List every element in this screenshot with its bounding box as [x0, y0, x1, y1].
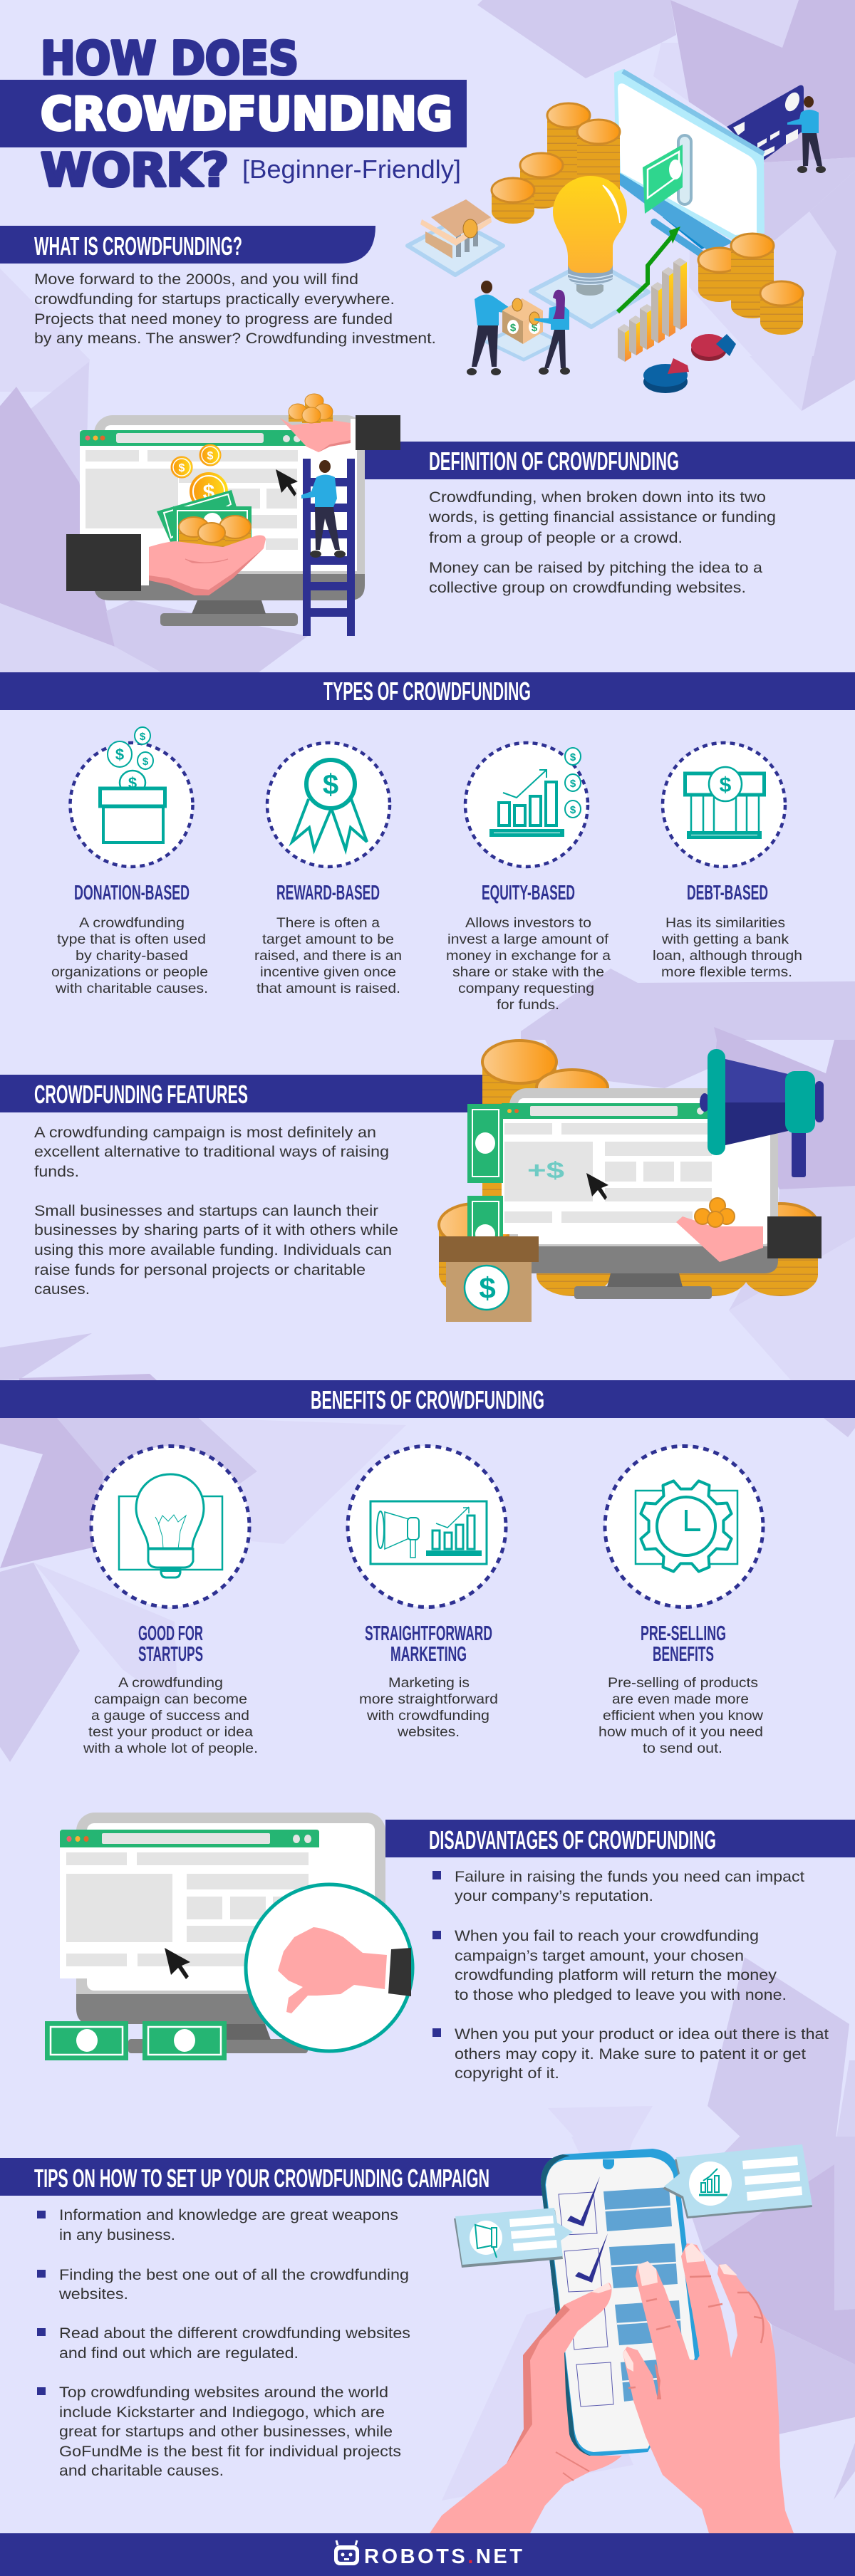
card description: Pre-selling of products	[608, 1675, 758, 1691]
card: donation-based	[51, 727, 208, 996]
coin stacks right	[698, 234, 803, 335]
section heading: types of crowdfunding	[0, 672, 855, 710]
bullet two: websites.	[58, 2286, 128, 2303]
icon: donation box in dashed circle: $	[115, 746, 124, 763]
heading text: WHAT IS CROWDFUNDING?	[34, 231, 242, 261]
card title: REWARD-BASED	[276, 882, 380, 904]
card description: with a whole lot of people.	[83, 1741, 258, 1756]
growth arrow	[618, 226, 680, 312]
card description: invest a large amount of	[447, 932, 609, 947]
section: crowdfunding features	[0, 1041, 824, 1322]
card description	[653, 915, 802, 980]
card title: EQUITY-BASED	[482, 882, 575, 904]
title line: how does: HOW DOES	[41, 33, 299, 85]
browser window	[80, 430, 307, 561]
section: disadvantages of crowdfunding	[45, 1813, 855, 2082]
banknote on screen	[643, 135, 691, 214]
people and donation box: $	[532, 322, 538, 334]
icon: ribbon medal in dashed circle	[267, 743, 390, 867]
body text: words, is getting financial assistance or funding	[428, 509, 776, 526]
title line: work?: WORK?	[41, 145, 229, 197]
icon: growth chart in dashed circle: $	[570, 751, 576, 763]
card description: campaign can become	[94, 1691, 247, 1707]
card: debt-based	[653, 743, 802, 980]
credit card and person	[727, 85, 826, 173]
icon: bank in dashed circle: $	[720, 773, 732, 797]
heading band	[0, 1075, 499, 1112]
card title: GOOD FOR	[138, 1622, 203, 1645]
section heading: benefits of crowdfunding	[0, 1380, 855, 1418]
icon: megaphone and chart in dashed circle	[348, 1446, 506, 1607]
body text: Small businesses and startups can launch their	[34, 1203, 378, 1219]
bullet one: in any business.	[59, 2227, 175, 2243]
illustration: monitor with hands, coins and ladder	[66, 394, 400, 636]
card description: Marketing is	[388, 1675, 470, 1691]
card description: efficient when you know	[603, 1708, 764, 1724]
body text	[34, 1125, 398, 1298]
card description: type that is often used	[57, 932, 206, 947]
right bubble	[663, 2144, 812, 2218]
megaphone	[700, 1049, 824, 1177]
ladder	[303, 459, 355, 636]
bullet three: When you put your product or idea out there is that	[455, 2026, 829, 2043]
illustration: monitor with thumbs down	[45, 1813, 413, 2060]
banknotes	[45, 2021, 227, 2060]
illustration: hands holding phone	[430, 2144, 812, 2533]
list rows	[603, 2187, 682, 2402]
card description: money in exchange for a	[446, 948, 611, 964]
heading band	[0, 226, 375, 264]
card description: are even made more	[612, 1691, 749, 1707]
body text: excellent alternative to traditional ways of raising	[34, 1144, 389, 1160]
card: pre-selling benefits	[598, 1446, 764, 1756]
icon: gear clock in dashed circle	[605, 1446, 763, 1607]
tilted monitor	[614, 69, 765, 259]
card description: A crowdfunding	[118, 1675, 223, 1691]
icon: donation box in dashed circle	[70, 727, 192, 867]
phone	[541, 2149, 700, 2456]
checkboxes	[559, 2192, 613, 2406]
light bulb on platform	[531, 176, 648, 327]
bullet one: Failure in raising the funds you need can impact	[455, 1869, 804, 1885]
falling coins: $	[203, 481, 215, 504]
bullet four: Top crowdfunding websites around the world	[59, 2384, 388, 2401]
title line: crowdfunding: CROWDFUNDING	[41, 88, 452, 141]
card title: DEBT-BASED	[687, 882, 768, 904]
body text: A crowdfunding campaign is most definitely an	[34, 1125, 376, 1141]
card: equity-based	[446, 743, 611, 1013]
card description: with charitable causes.	[55, 981, 208, 996]
card description: by charity-based	[76, 948, 188, 964]
bullet list	[37, 2207, 410, 2479]
body paragraph	[34, 271, 436, 347]
card description	[83, 1675, 258, 1756]
hand with coins	[676, 1198, 822, 1262]
card description: how much of it you need	[598, 1724, 763, 1740]
card title	[138, 1622, 203, 1666]
body text: Money can be raised by pitching the idea to a	[429, 560, 762, 576]
body text: Crowdfunding, when broken down into its two	[429, 489, 766, 506]
bullet two: to those who pledged to leave you with none.	[455, 1987, 787, 2003]
browser window	[60, 1830, 319, 1978]
icon: donation box in dashed circle: $	[128, 774, 137, 792]
cursor	[276, 469, 298, 496]
bullet three: copyright of it.	[455, 2065, 559, 2082]
card: reward-based	[254, 743, 402, 996]
section: tips on setting up a crowdfunding campaign	[0, 2144, 812, 2533]
body text: businesses by sharing parts of it with others while	[34, 1222, 398, 1239]
left bubble	[454, 2208, 573, 2268]
body text: using this more available funding. Individuals can	[34, 1242, 392, 1258]
footer band	[0, 2533, 855, 2576]
donation box: $	[479, 1271, 496, 1305]
card description	[598, 1675, 764, 1756]
cursor	[165, 1948, 190, 1979]
donation box	[439, 1236, 539, 1322]
heading band	[385, 1820, 855, 1857]
bullet one: your company’s reputation.	[455, 1888, 653, 1904]
bullet two: campaign’s target amount, your chosen	[455, 1948, 744, 1964]
bar chart	[618, 258, 687, 362]
bullet four: include Kickstarter and Indiegogo, which are	[59, 2404, 385, 2421]
icon: donation box in dashed circle: $	[142, 756, 149, 768]
card description: websites.	[397, 1724, 460, 1740]
plus dollar sign: +$	[527, 1157, 564, 1183]
cursor	[586, 1173, 608, 1200]
body text: from a group of people or a crowd.	[429, 530, 683, 546]
thumbs down circle	[246, 1884, 413, 2051]
top hand with sleeve and coins	[280, 394, 400, 452]
card description: with crowdfunding	[366, 1708, 489, 1724]
bullet one	[432, 1869, 804, 1904]
body paragraph: Projects that need money to progress are funded	[34, 311, 393, 328]
bullet three: and find out which are regulated.	[59, 2345, 299, 2362]
bullet three: Read about the different crowdfunding websites	[59, 2325, 410, 2342]
bottom hand with sleeve	[66, 534, 266, 595]
bullet three	[432, 2026, 829, 2082]
logo: robot icon	[334, 2540, 359, 2565]
card description: There is often a	[276, 915, 380, 931]
bullet four: GoFundMe is the best fit for individual projects	[59, 2444, 401, 2460]
card description: share or stake with the	[452, 964, 604, 980]
bullet four	[37, 2384, 401, 2479]
monitor	[76, 1813, 385, 2053]
coin pile in hand	[179, 516, 251, 548]
illustration: monitor with megaphone, money and coins	[439, 1041, 824, 1322]
card description: loan, although through	[653, 948, 802, 964]
card: good for startups	[83, 1446, 258, 1756]
banknotes	[157, 490, 252, 546]
card title: STRAIGHTFORWARD	[365, 1622, 492, 1645]
banknotes	[467, 1104, 503, 1244]
icon: growth chart in dashed circle: $	[570, 778, 576, 790]
card description: company requesting	[458, 981, 594, 996]
coin stacks	[439, 1041, 818, 1296]
check marks	[567, 2176, 608, 2283]
card title: DONATION-BASED	[74, 882, 190, 904]
card description: raised, and there is an	[254, 948, 402, 964]
section heading: benefits of crowdfunding: BENEFITS OF CROWDFUNDING	[311, 1385, 544, 1414]
icon: light bulb in dashed circle	[91, 1446, 249, 1607]
card description: for funds.	[497, 997, 559, 1013]
card description: with getting a bank	[661, 932, 789, 947]
body text: funds.	[34, 1164, 79, 1180]
body paragraph: Move forward to the 2000s, and you will find	[34, 271, 358, 288]
card title: MARKETING	[390, 1643, 467, 1666]
body text: collective group on crowdfunding websites.	[429, 580, 746, 596]
falling coins: $	[179, 462, 185, 474]
card description: target amount to be	[262, 932, 394, 947]
body paragraph: crowdfunding for startups practically everywhere.	[34, 291, 395, 308]
card description: more straightforward	[359, 1691, 498, 1707]
card description	[51, 915, 208, 996]
card description: that amount is raised.	[256, 981, 400, 996]
monitor	[509, 1088, 778, 1299]
bullet two: When you fail to reach your crowdfunding	[455, 1928, 759, 1944]
card title: STARTUPS	[138, 1643, 203, 1666]
section: definition of crowdfunding	[66, 394, 855, 636]
subtitle: [Beginner-Friendly]	[242, 155, 461, 184]
card description	[359, 1675, 498, 1740]
section heading: types of crowdfunding: TYPES OF CROWDFUNDING	[323, 677, 531, 706]
illustration: hero crowdfunding scene	[408, 69, 826, 393]
card description: to send out.	[643, 1741, 722, 1756]
coin stacks left	[492, 103, 620, 224]
card description: A crowdfunding	[79, 915, 185, 931]
card description: organizations or people	[51, 964, 208, 980]
body text: raise funds for personal projects or charitable	[34, 1262, 366, 1278]
card: straightforward marketing	[348, 1446, 506, 1740]
card title	[365, 1622, 492, 1666]
icon: ribbon medal in dashed circle: $	[323, 769, 338, 801]
monitor	[94, 415, 365, 626]
right hand	[623, 2243, 794, 2533]
body text	[428, 489, 776, 596]
heading band	[364, 442, 855, 479]
card description: Has its similarities	[665, 915, 785, 931]
title band	[0, 80, 467, 147]
title block	[0, 33, 467, 197]
people and donation box: $	[510, 322, 517, 334]
icon: bank in dashed circle	[663, 743, 785, 867]
browser window	[502, 1103, 722, 1234]
bullet list	[432, 1869, 829, 2082]
person on ladder	[301, 460, 346, 558]
icon: growth chart in dashed circle: $	[570, 804, 576, 816]
logo: wordmark: ROBOTS.NET	[364, 2545, 522, 2568]
card description: Allows investors to	[465, 915, 591, 931]
heading band	[0, 2158, 556, 2196]
heading text: CROWDFUNDING FEATURES	[34, 1080, 248, 1109]
card description: test your product or idea	[88, 1724, 253, 1740]
bullet two: crowdfunding platform will return the money	[455, 1967, 777, 1983]
bullet three: others may copy it. Make sure to patent it or get	[455, 2046, 806, 2063]
heading text: DEFINITION OF CROWDFUNDING	[429, 447, 679, 476]
card title	[641, 1622, 726, 1666]
bullet two	[37, 2267, 409, 2303]
body text: causes.	[34, 1281, 90, 1298]
bullet two: Finding the best one out of all the crowdfunding	[59, 2267, 409, 2283]
card description	[254, 915, 402, 996]
card description: incentive given once	[260, 964, 396, 980]
pie charts	[643, 334, 736, 393]
card description: more flexible terms.	[661, 964, 792, 980]
icon: growth chart in dashed circle	[465, 743, 588, 867]
section: what is crowdfunding	[0, 226, 436, 347]
card title: BENEFITS	[653, 1643, 714, 1666]
bullet four: and charitable causes.	[59, 2463, 224, 2479]
bullet two	[432, 1928, 787, 2003]
bank on platform	[408, 199, 503, 275]
bullet one	[37, 2207, 398, 2243]
left hand	[430, 2283, 622, 2533]
heading text: TIPS ON HOW TO SET UP YOUR CROWDFUNDING CAMPAIGN	[34, 2164, 489, 2193]
card description: a gauge of success and	[91, 1708, 249, 1724]
card title: PRE-SELLING	[641, 1622, 726, 1645]
bullet three	[37, 2325, 410, 2362]
body paragraph: by any means. The answer? Crowdfunding investment.	[34, 330, 436, 347]
bullet one: Information and knowledge are great weapons	[59, 2207, 398, 2223]
people and donation box	[467, 281, 570, 375]
falling coins	[171, 444, 228, 511]
icon: donation box in dashed circle: $	[140, 731, 146, 743]
bullet four: great for startups and other businesses, while	[59, 2424, 393, 2440]
falling coins: $	[207, 450, 214, 462]
card description	[446, 915, 611, 1013]
